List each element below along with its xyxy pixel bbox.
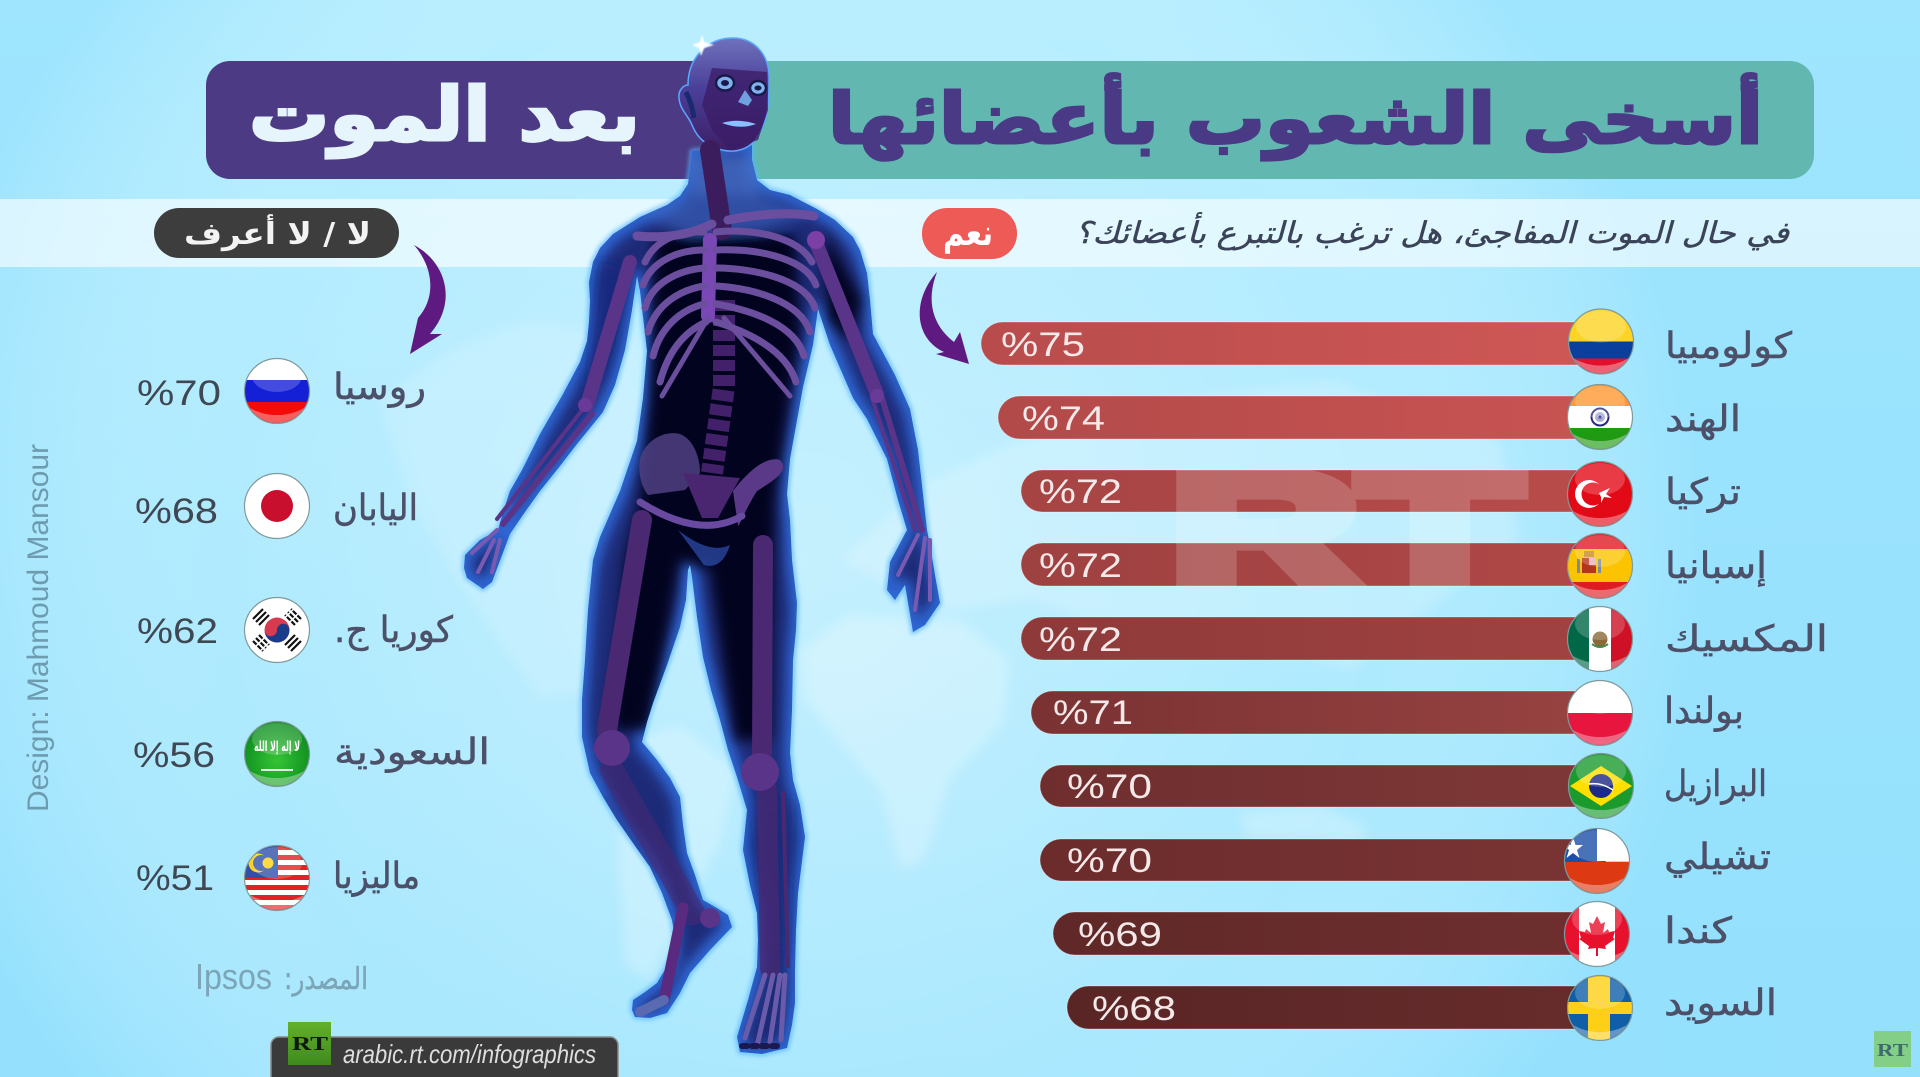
flag: Turkey: [1567, 461, 1633, 527]
question text: في حال الموت المفاجئ، هل ترغب بالتبرع بأعضائك؟: [1075, 212, 1790, 251]
bar: Chile: [1040, 839, 1606, 881]
row: Malaysia: %51: [136, 859, 214, 898]
list: no: [133, 358, 490, 911]
pill: no or don't know: [154, 208, 399, 258]
row: Japan: [135, 474, 418, 538]
source: Ipsos: [195, 956, 272, 997]
bar: Mexico: [1021, 617, 1606, 660]
skeleton: right leg: [741, 545, 788, 1046]
bar: Sweden: %68: [1092, 990, 1176, 1028]
flag: Brazil: [1568, 753, 1634, 819]
row: Malaysia: ماليزيا: [333, 856, 420, 897]
label: Sweden: السويد: [1664, 983, 1777, 1024]
bar: Turkey: %72: [1039, 473, 1122, 511]
skeleton: left leg: [594, 520, 720, 1012]
logo: RT green: RT: [292, 1033, 329, 1055]
bar: Chile: %70: [1067, 842, 1152, 880]
logo: RT corner: RT: [1877, 1040, 1908, 1060]
text: website: arabic.rt.com/infographics: [343, 1039, 596, 1069]
bar: Colombia: %75: [1001, 326, 1085, 364]
figure: skeleton: [472, 150, 930, 1046]
flag: Colombia: [1568, 308, 1634, 374]
arrow: yes: [920, 272, 969, 364]
bar: Turkey: [1021, 470, 1606, 512]
heading: main title: أسخى الشعوب بأعضائها: [828, 73, 1763, 160]
bar chart: yes: [981, 322, 1606, 1029]
row: Saudi Arabia: السعودية: [334, 732, 490, 773]
footer badge: [271, 1022, 618, 1077]
flag: Sweden: [1567, 975, 1633, 1041]
pill: yes: نعم: [943, 213, 993, 254]
label: Spain: إسبانيا: [1665, 546, 1767, 587]
skeleton: sternum: [708, 240, 710, 316]
figure: body silhouette: [464, 145, 940, 1054]
figure: sparkle: [692, 34, 714, 56]
row: South Korea: كوريا ج.: [334, 610, 454, 651]
row: Russia: روسيا: [333, 367, 426, 408]
bar: Canada: [1053, 912, 1606, 955]
skeleton: right arm: [815, 240, 930, 610]
pill: no or don't know: لا / لا أعرف: [184, 214, 371, 252]
bar: Mexico: %72: [1039, 621, 1122, 659]
row: Russia: [137, 358, 426, 424]
label: Chile: تشيلي: [1664, 837, 1771, 878]
bar: Brazil: [1040, 765, 1606, 807]
bar: Sweden: [1067, 986, 1606, 1029]
pill: yes: [922, 208, 1017, 259]
row: Japan: %68: [135, 492, 218, 531]
skeleton: spine: [710, 150, 722, 230]
arrow: no: [410, 245, 446, 354]
flag: Spain: [1567, 533, 1633, 599]
country labels: yes: [1664, 326, 1828, 1024]
row: South Korea: %62: [137, 612, 218, 651]
logo: RT corner: [1874, 1031, 1911, 1067]
RT watermark: RT: [1170, 440, 1520, 621]
row: Saudi Arabia: [133, 722, 490, 786]
label: Mexico: المكسيك: [1665, 619, 1828, 660]
flag: India: [1567, 384, 1633, 450]
skeleton: clavicles: [637, 214, 814, 237]
source: [195, 956, 368, 997]
title panel: purple: [206, 61, 710, 179]
label: Brazil: البرازيل: [1664, 764, 1767, 805]
row: Saudi Arabia: %56: [133, 736, 215, 775]
flag: Canada: [1564, 901, 1630, 967]
label: Poland: بولندا: [1664, 691, 1744, 732]
row: Japan: اليابان: [333, 488, 418, 529]
label: Canada: كندا: [1664, 911, 1733, 952]
title panel: teal: [640, 61, 1814, 179]
figure: outer glow: [464, 145, 940, 1054]
bar: India: %74: [1022, 400, 1105, 438]
row: South Korea: [137, 598, 454, 662]
bar: Spain: [1021, 543, 1606, 586]
skeleton: pelvis: [639, 433, 783, 566]
logo: RT green: [288, 1022, 331, 1065]
skeleton: ribs: [643, 231, 816, 396]
bar: Poland: %71: [1053, 694, 1133, 732]
label: Colombia: كولومبيا: [1665, 326, 1793, 367]
heading: after death: بعد الموت: [249, 72, 640, 159]
flag: Mexico: [1567, 606, 1633, 672]
world map: [380, 320, 1520, 980]
figure: head: [679, 38, 769, 151]
bar: Canada: %69: [1078, 916, 1162, 954]
source: المصدر:: [284, 962, 368, 997]
bar: Colombia: [981, 322, 1606, 365]
skeleton: left arm: [472, 262, 630, 572]
bar: India: [998, 396, 1606, 439]
row: Russia: %70: [137, 374, 221, 413]
row: Saudi Arabia: لا إله إلا الله: [254, 739, 300, 755]
label: Turkey: تركيا: [1665, 472, 1741, 513]
bar: Poland: [1031, 691, 1606, 734]
bar: Spain: %72: [1039, 547, 1122, 585]
label: India: الهند: [1665, 399, 1741, 440]
bar: Brazil: %70: [1067, 768, 1152, 806]
designer credit: Design: Mahmoud Mansour: [22, 444, 55, 812]
title bar: [206, 61, 1814, 179]
row: Malaysia: [136, 845, 420, 911]
flag: Poland: [1567, 680, 1633, 746]
human figure: [440, 34, 960, 1070]
flag: Chile: [1563, 828, 1630, 894]
question band: [0, 199, 1920, 267]
